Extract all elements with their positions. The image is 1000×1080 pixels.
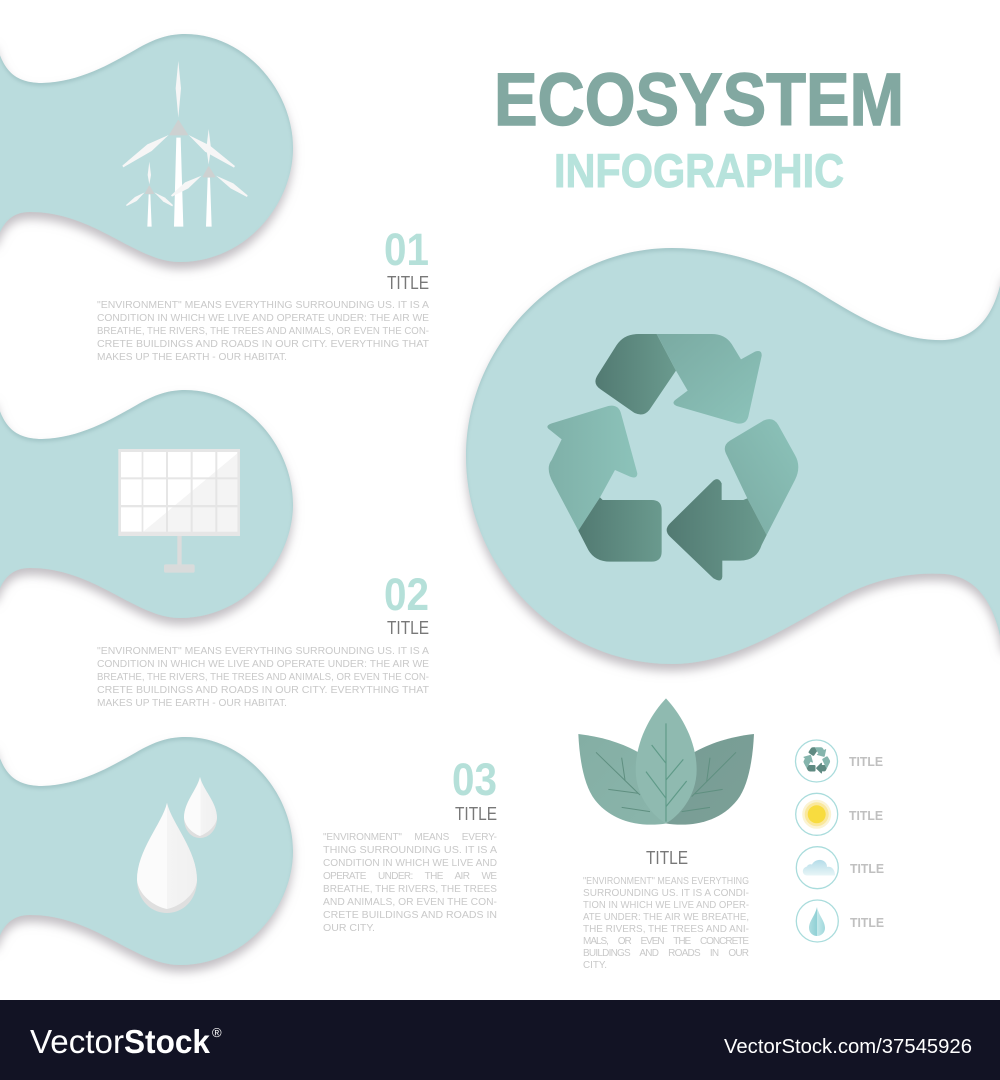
text block: leaves body [583,876,749,971]
title 01: TITLE [387,273,429,293]
body 03: CONDITION IN WHICH WE LIVE AND [323,858,497,869]
body 03: OUR CITY. [323,923,375,934]
text block: leaves body: MALS, OR EVEN THE CONCRETE [583,936,749,947]
body 01: MAKES UP THE EARTH - OUR HABITAT. [97,352,287,363]
icon: leaves [578,698,754,825]
panel: solar energy blob [0,390,293,618]
icon: wind turbines [122,61,248,227]
image id: VectorStock.com/37545926 [724,1036,972,1058]
footer band [0,1000,1000,1080]
icon: recycling symbol [547,334,798,580]
body 03 [323,832,497,934]
title 02: TITLE [387,618,429,638]
body 01: CRETE BUILDINGS AND ROADS IN OUR CITY. EVERYTHING THAT [97,339,429,350]
body 03: BREATHE, THE RIVERS, THE TREES [323,884,497,895]
label: small recycling: TITLE [849,754,883,769]
body 02 [97,646,429,709]
number 03: 03 [452,754,497,805]
icon: cloud [796,847,838,889]
number 02: 02 [384,569,429,620]
title: leaves: TITLE [646,848,688,868]
icon: solar panel [118,449,240,573]
text block: section 03 [323,754,497,934]
body 01: BREATHE, THE RIVERS, THE TREES AND ANIMALS, OR EVEN THE CON- [97,326,429,337]
text block: leaves body: CITY. [583,960,607,971]
body 03: CRETE BUILDINGS AND ROADS IN [323,910,497,921]
footer band: ® [212,1025,222,1040]
panel: water blob [0,737,293,965]
body 02: BREATHE, THE RIVERS, THE TREES AND ANIMALS, OR EVEN THE CON- [97,672,429,683]
label: water drop: TITLE [850,915,884,930]
label: cloud: TITLE [850,861,884,876]
body 02: CONDITION IN WHICH WE LIVE AND OPERATE UNDER: THE AIR WE [97,659,429,670]
text block: leaves body: ATE UNDER: THE AIR WE BREATHE, [583,912,749,923]
body 03: AND ANIMALS, OR EVEN THE CON- [323,897,497,908]
body 03: OPERATE UNDER: THE AIR WE [323,871,497,882]
body 02: "ENVIRONMENT" MEANS EVERYTHING SURROUNDING US. IT IS A [97,646,429,657]
logo: Vector [30,1023,124,1060]
title 03: TITLE [455,804,497,824]
body 01 [97,300,429,363]
label: sun: TITLE [849,808,883,823]
body 02: CRETE BUILDINGS AND ROADS IN OUR CITY. EVERYTHING THAT [97,685,429,696]
body 03: "ENVIRONMENT" MEANS EVERY- [323,832,497,843]
heading: infographic: INFOGRAPHIC [554,144,844,197]
icon: water drops [137,777,217,913]
panel: main recycling blob [466,248,1000,664]
body 01: CONDITION IN WHICH WE LIVE AND OPERATE UNDER: THE AIR WE [97,313,429,324]
text block: leaves body: TION IN WHICH WE LIVE AND OPER- [583,900,749,911]
text block: section 01 [97,224,429,363]
text block: leaves body: THE RIVERS, THE TREES AND ANI- [583,924,749,935]
body 01: "ENVIRONMENT" MEANS EVERYTHING SURROUNDING US. IT IS A [97,300,429,311]
panel: wind energy blob [0,34,293,262]
number 01: 01 [384,224,429,275]
text block: leaves body: BUILDINGS AND ROADS IN OUR [583,948,749,959]
text block: leaves body: SURROUNDING US. IT IS A CONDI- [583,888,749,899]
text block: leaves body: "ENVIRONMENT" MEANS EVERYTHING [583,876,749,887]
body 02: MAKES UP THE EARTH - OUR HABITAT. [97,698,287,709]
icon: water drop [796,900,838,942]
body 03: THING SURROUNDING US. IT IS A [323,845,497,856]
icon: sun [796,793,838,835]
icon: small recycling [796,740,838,782]
heading: ecosystem: ECOSYSTEM [494,58,904,141]
text block: section 02 [97,569,429,709]
title [494,58,904,197]
footer band: Stock [124,1023,211,1060]
